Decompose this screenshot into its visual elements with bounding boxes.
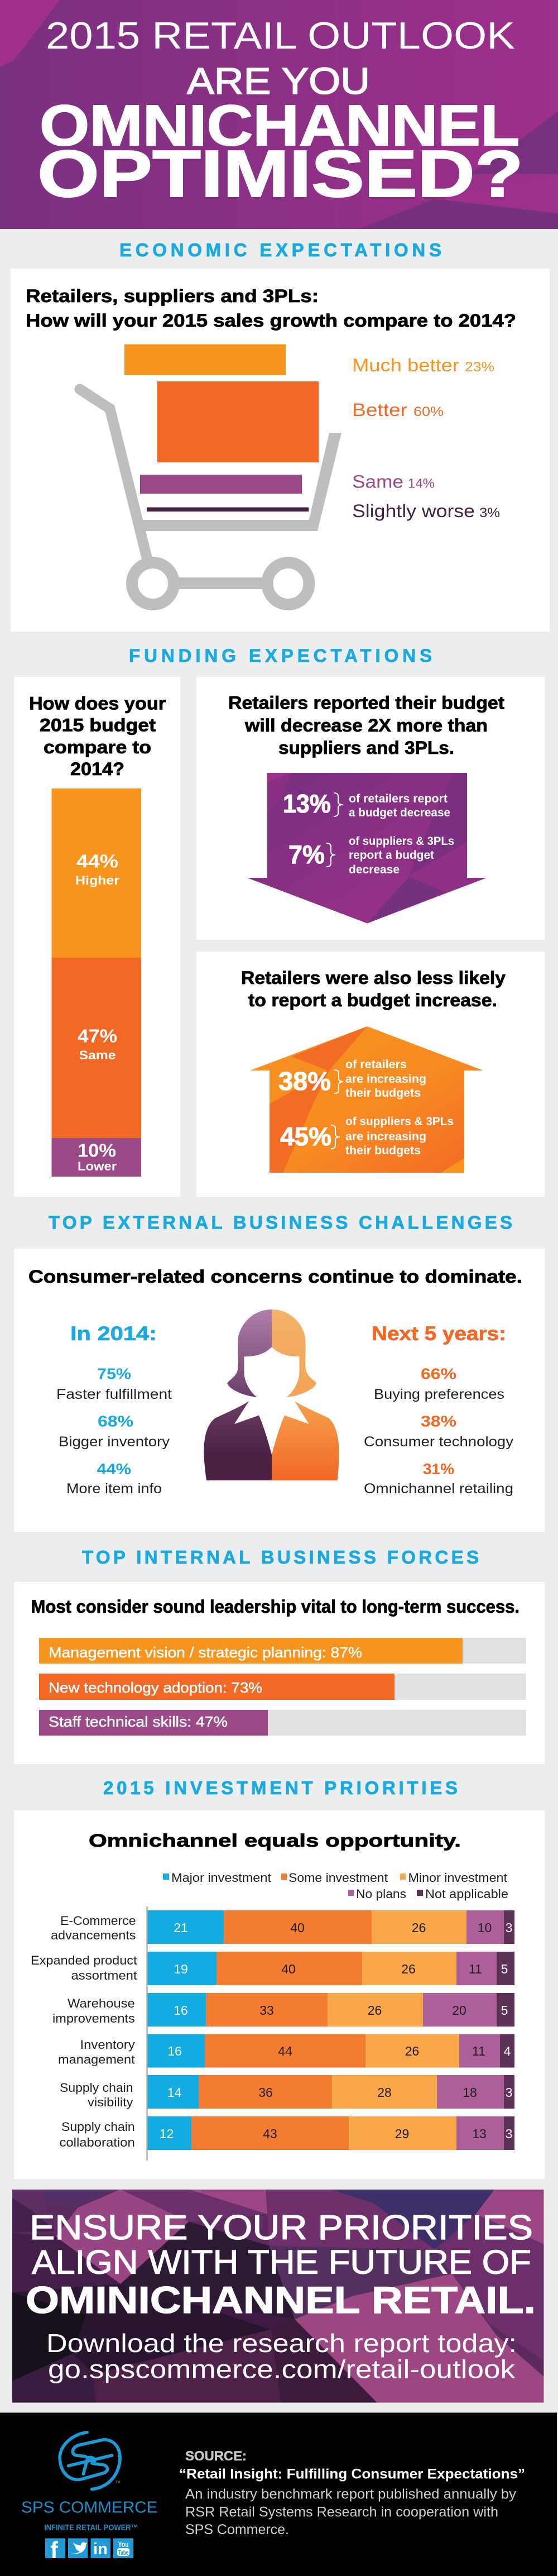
row: expanded product assortment: Expanded product bbox=[31, 1953, 137, 1967]
bar: slightly worse 3% bbox=[147, 507, 309, 512]
bar: much better 23% bbox=[124, 344, 286, 375]
panel heading: Retailers were also less likely bbox=[241, 968, 506, 988]
row: warehouse improvements: improvements bbox=[52, 2011, 135, 2025]
icon: youtube: Tube bbox=[118, 2549, 128, 2556]
panel heading bbox=[228, 692, 504, 758]
bar: staff skills 47% bbox=[39, 1710, 526, 1736]
label: same bbox=[352, 471, 435, 491]
panel heading: How will your 2015 sales growth compare to 2014? bbox=[26, 310, 516, 331]
stacked bar: lower 10% bbox=[51, 1138, 141, 1177]
stat: 13% of retailers: of retailers report bbox=[349, 792, 448, 805]
stacked bar: higher 44%: 44% bbox=[76, 851, 118, 871]
cta headline bbox=[26, 2209, 536, 2321]
row: e-commerce advancements: 40 bbox=[290, 1920, 305, 1935]
row: supply chain visibility bbox=[60, 2075, 514, 2109]
logo: sps mark bbox=[60, 2432, 120, 2489]
row: expanded product assortment: assortment bbox=[71, 1968, 137, 1982]
bar: management vision 87%: Management vision / strategic planning: 87% bbox=[49, 1644, 362, 1661]
column: next 5 years bbox=[364, 1323, 514, 1497]
icon: facebook bbox=[45, 2537, 65, 2563]
cta download text: go.spscommerce.com/retail-outlook bbox=[48, 2354, 516, 2383]
label: slightly worse: 3% bbox=[479, 505, 500, 520]
bar: same 14% bbox=[140, 475, 302, 494]
row: warehouse improvements: Warehouse bbox=[68, 1996, 135, 2010]
chart legend: Minor investment bbox=[408, 1871, 507, 1885]
column: next 5 years: Omnichannel retailing bbox=[364, 1481, 513, 1497]
row: supply chain visibility: 3 bbox=[506, 2085, 512, 2100]
logo: tagline: INFINITE RETAIL POWER™ bbox=[44, 2524, 138, 2532]
title: omnichannel: OMNICHANNEL bbox=[40, 93, 519, 157]
stat: 38% of retailers bbox=[278, 1058, 426, 1100]
label: better bbox=[352, 400, 444, 420]
bar: new technology 73% bbox=[39, 1674, 526, 1700]
column: next 5 years: Consumer technology bbox=[364, 1434, 514, 1450]
row: warehouse improvements: 26 bbox=[368, 2003, 382, 2018]
stacked bar chart bbox=[31, 1906, 514, 2161]
stat: 13% of retailers: a budget decrease bbox=[349, 806, 450, 819]
label: much better bbox=[352, 355, 494, 375]
row: inventory management: Inventory bbox=[80, 2038, 135, 2052]
row: inventory management bbox=[58, 2034, 514, 2067]
row: supply chain collaboration: 12 bbox=[160, 2126, 174, 2141]
row: inventory management: management bbox=[58, 2053, 135, 2066]
row: inventory management: 26 bbox=[405, 2044, 419, 2058]
stat: 38% of retailers: their budgets bbox=[345, 1087, 421, 1100]
panel: call to action bbox=[11, 2186, 547, 2404]
heading: top internal business forces: TOP INTERNAL BUSINESS FORCES bbox=[82, 1547, 479, 1567]
icon: twitter bbox=[68, 2539, 88, 2558]
row: e-commerce advancements: 3 bbox=[506, 1920, 512, 1935]
source text: SPS Commerce. bbox=[185, 2522, 289, 2537]
row: e-commerce advancements: 10 bbox=[478, 1920, 492, 1935]
heading: funding expectations: FUNDING EXPECTATIONS bbox=[129, 646, 432, 666]
column: in 2014: Faster fulfillment bbox=[56, 1387, 172, 1402]
stat: 45% of suppliers bbox=[280, 1115, 454, 1157]
source text: “Retail Insight: Fulfilling Consumer Expectations” bbox=[179, 2466, 525, 2482]
bar: staff skills 47%: Staff technical skills: 47% bbox=[49, 1713, 228, 1730]
stat: 45% of suppliers: are increasing bbox=[345, 1130, 426, 1143]
chart legend: Some investment bbox=[288, 1871, 388, 1885]
row: warehouse improvements: 16 bbox=[174, 2003, 188, 2018]
stat: 7% of suppliers: 7% bbox=[288, 840, 325, 869]
panel: footer bbox=[0, 2412, 557, 2576]
title: 2015 retail outlook: 2015 RETAIL OUTLOOK bbox=[46, 15, 515, 57]
stacked bar: higher 44%: Higher bbox=[75, 873, 119, 887]
label: slightly worse: Slightly worse bbox=[352, 501, 475, 521]
panel: budget increase bbox=[196, 952, 545, 1197]
cta download text: Download the research report today: bbox=[46, 2329, 517, 2358]
panel heading: How does your bbox=[29, 694, 166, 714]
column: in 2014: 44% bbox=[97, 1460, 131, 1478]
source text: An industry benchmark report published annually by bbox=[185, 2486, 517, 2502]
panel heading: will decrease 2X more than bbox=[244, 715, 488, 735]
logo: trademark: TM bbox=[116, 2481, 121, 2484]
row: expanded product assortment: 11 bbox=[469, 1962, 482, 1976]
panel heading: to report a budget increase. bbox=[248, 990, 497, 1010]
row: supply chain collaboration: 13 bbox=[472, 2126, 487, 2141]
icon: woman silhouette bbox=[204, 1309, 339, 1480]
stat: 7% of suppliers: of suppliers & 3PLs bbox=[349, 835, 454, 848]
panel: economic expectations bbox=[11, 269, 550, 632]
chart legend bbox=[163, 1871, 508, 1901]
row: warehouse improvements bbox=[52, 1993, 514, 2027]
column: in 2014 bbox=[56, 1323, 172, 1497]
panel heading: compare to bbox=[44, 737, 151, 757]
row: inventory management: 16 bbox=[167, 2044, 182, 2058]
column: next 5 years: 66% bbox=[421, 1365, 456, 1383]
source text: SOURCE: bbox=[185, 2449, 247, 2464]
panel: internal forces bbox=[14, 1582, 545, 1764]
stacked bar: higher 44% bbox=[51, 788, 141, 958]
panel: budget comparison bbox=[14, 677, 180, 1197]
row: expanded product assortment: 40 bbox=[281, 1962, 296, 1976]
chart legend: Major investment bbox=[171, 1871, 271, 1885]
stacked bar: same 47%: 47% bbox=[78, 1025, 117, 1046]
stacked bar: same 47%: Same bbox=[79, 1048, 116, 1062]
logo: wordmark: SPS COMMERCE bbox=[21, 2498, 157, 2516]
row: supply chain visibility: 14 bbox=[167, 2085, 181, 2100]
row: e-commerce advancements: advancements bbox=[51, 1928, 136, 1942]
column: next 5 years: 31% bbox=[423, 1460, 454, 1478]
panel heading: 2014? bbox=[70, 759, 124, 779]
stacked bar: lower 10%: Lower bbox=[78, 1159, 117, 1173]
row: e-commerce advancements: E-Commerce bbox=[60, 1914, 136, 1928]
stacked bar: lower 10%: 10% bbox=[78, 1140, 116, 1160]
label: better: 60% bbox=[413, 404, 444, 419]
title: are you: ARE YOU bbox=[187, 60, 370, 102]
panel heading bbox=[241, 968, 506, 1010]
column: in 2014: More item info bbox=[66, 1481, 162, 1497]
stacked bar: same 47% bbox=[51, 958, 141, 1138]
panel heading: Retailers reported their budget bbox=[228, 692, 504, 713]
row: supply chain visibility: Supply chain bbox=[60, 2081, 133, 2095]
stat: 13% of retailers: 13% bbox=[283, 789, 331, 818]
row: expanded product assortment bbox=[31, 1952, 514, 1985]
column: in 2014: In 2014: bbox=[70, 1323, 157, 1345]
stat: 7% of suppliers: report a budget bbox=[349, 849, 434, 862]
row: expanded product assortment: 19 bbox=[174, 1962, 188, 1976]
row: expanded product assortment: 5 bbox=[501, 1962, 508, 1976]
icon: shopping cart bbox=[80, 389, 341, 604]
row: warehouse improvements: 20 bbox=[452, 2003, 466, 2018]
stat: 45% of suppliers: of suppliers & 3PLs bbox=[345, 1115, 454, 1128]
row: supply chain collaboration: 3 bbox=[506, 2126, 512, 2141]
arrow: house up bbox=[250, 1026, 483, 1173]
stat: 38% of retailers: are increasing bbox=[345, 1073, 426, 1086]
stat: 45% of suppliers: their budgets bbox=[345, 1144, 421, 1157]
column: next 5 years: Buying preferences bbox=[374, 1387, 504, 1402]
row: supply chain visibility: visibility bbox=[88, 2095, 133, 2109]
stat: 38% of retailers: 38% bbox=[278, 1067, 331, 1096]
row: supply chain visibility: 18 bbox=[463, 2085, 477, 2100]
label: much better: 23% bbox=[465, 360, 494, 375]
row: warehouse improvements: 5 bbox=[501, 2003, 508, 2018]
row: expanded product assortment: 26 bbox=[401, 1962, 416, 1976]
row: inventory management: 11 bbox=[472, 2044, 485, 2058]
row: warehouse improvements: 33 bbox=[259, 2003, 274, 2018]
stat: 38% of retailers: of retailers bbox=[345, 1058, 407, 1071]
row: e-commerce advancements: 21 bbox=[174, 1920, 188, 1935]
column: in 2014: 75% bbox=[97, 1365, 131, 1383]
panel: hero header bbox=[0, 0, 558, 229]
column: in 2014: Bigger inventory bbox=[59, 1434, 170, 1450]
label: same: 14% bbox=[408, 476, 435, 491]
chart legend: No plans bbox=[356, 1887, 406, 1901]
panel heading bbox=[26, 286, 516, 331]
row: e-commerce advancements: 26 bbox=[412, 1920, 426, 1935]
bar: better 60% bbox=[157, 381, 319, 462]
source text: RSR Retail Systems Research in cooperation with bbox=[185, 2504, 498, 2520]
panel: budget decrease bbox=[196, 677, 545, 940]
heading: top external business challenges: TOP EXTERNAL BUSINESS CHALLENGES bbox=[49, 1212, 512, 1233]
row: supply chain collaboration bbox=[59, 2116, 514, 2150]
label: much better: Much better bbox=[352, 355, 459, 375]
row: inventory management: 44 bbox=[278, 2044, 292, 2058]
row: supply chain collaboration: 43 bbox=[263, 2126, 277, 2141]
row: supply chain collaboration: 29 bbox=[395, 2126, 409, 2141]
cta headline: ALIGN WITH THE FUTURE OF bbox=[32, 2244, 531, 2281]
bar: management vision 87% bbox=[39, 1638, 526, 1664]
icon: linkedin: in bbox=[93, 2540, 108, 2558]
panel heading: Consumer-related concerns continue to dominate. bbox=[28, 1267, 522, 1287]
source text bbox=[179, 2449, 525, 2537]
panel: external challenges bbox=[14, 1249, 545, 1532]
panel heading: Most consider sound leadership vital to long-term success. bbox=[31, 1597, 519, 1617]
heading: 2015 investment priorities: 2015 INVESTMENT PRIORITIES bbox=[103, 1777, 458, 1798]
row: supply chain visibility: 28 bbox=[377, 2085, 392, 2100]
cta headline: ENSURE YOUR PRIORITIES bbox=[30, 2209, 533, 2247]
stat: 13% of retailers bbox=[283, 789, 450, 819]
cta headline: OMINICHANNEL RETAIL. bbox=[26, 2279, 536, 2321]
icon: linkedin bbox=[90, 2539, 110, 2558]
row: e-commerce advancements bbox=[51, 1910, 514, 1944]
panel heading: 2015 budget bbox=[40, 715, 156, 735]
arrow: down bbox=[247, 773, 487, 924]
icon: facebook: f bbox=[50, 2537, 59, 2563]
panel: investment priorities bbox=[14, 1810, 545, 2179]
icon: youtube bbox=[113, 2539, 133, 2558]
chart legend: Not applicable bbox=[425, 1887, 508, 1901]
cta download text bbox=[46, 2329, 517, 2383]
panel heading bbox=[29, 694, 166, 779]
row: supply chain collaboration: collaboration bbox=[59, 2135, 135, 2149]
row: supply chain visibility: 36 bbox=[258, 2085, 273, 2100]
stat: 7% of suppliers: decrease bbox=[349, 863, 400, 876]
icon: youtube: You bbox=[118, 2540, 128, 2549]
panel heading: Omnichannel equals opportunity. bbox=[89, 1831, 461, 1851]
column: in 2014: 68% bbox=[98, 1413, 133, 1430]
bar: new technology 73%: New technology adoption: 73% bbox=[49, 1679, 262, 1696]
label: better: Better bbox=[352, 400, 407, 420]
column: next 5 years: 38% bbox=[421, 1413, 456, 1430]
panel heading: suppliers and 3PLs. bbox=[278, 738, 454, 758]
stat: 7% of suppliers bbox=[288, 835, 454, 876]
column: next 5 years: Next 5 years: bbox=[372, 1323, 506, 1345]
label: same: Same bbox=[352, 471, 403, 491]
row: inventory management: 4 bbox=[504, 2044, 511, 2058]
panel heading: Retailers, suppliers and 3PLs: bbox=[26, 286, 319, 306]
stat: 45% of suppliers: 45% bbox=[280, 1122, 331, 1151]
title: optimised: OPTIMISED? bbox=[37, 137, 523, 211]
heading: economic expectations: ECONOMIC EXPECTATIONS bbox=[119, 240, 441, 260]
row: supply chain collaboration: Supply chain bbox=[61, 2120, 135, 2134]
